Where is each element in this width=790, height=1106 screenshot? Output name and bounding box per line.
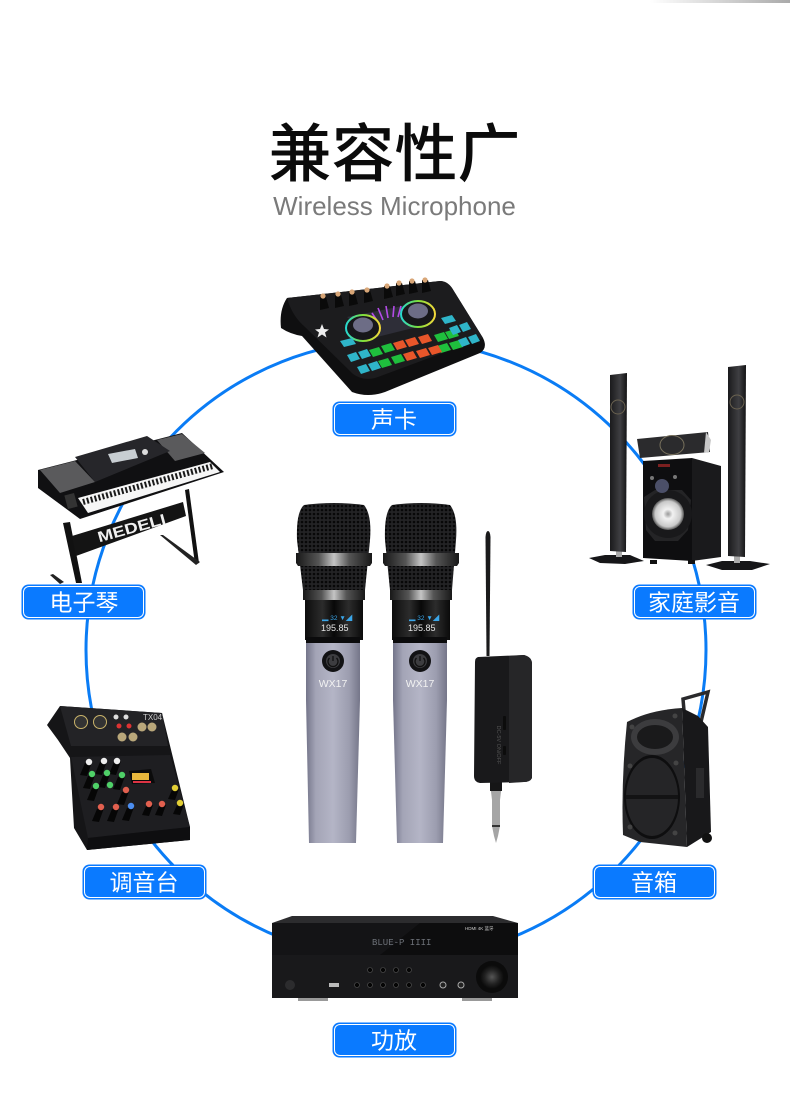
power button [322, 650, 344, 672]
subtitle: Wireless Microphone [273, 191, 516, 221]
switch label: DC-5V ON/OFF [495, 726, 501, 765]
label: home theatre [632, 584, 756, 620]
knobs [320, 280, 431, 310]
body [38, 433, 224, 519]
mixer knob caps [86, 758, 183, 810]
wireless receiver [474, 531, 532, 843]
label: speaker [592, 864, 716, 900]
left tower [589, 555, 644, 564]
label: electronic keyboard [22, 584, 146, 620]
mixer knob bodies [80, 761, 184, 822]
microphone 2 [383, 503, 459, 843]
title: 兼容性广 [268, 120, 520, 190]
top edge shadow [650, 0, 790, 3]
label: display text: BLUE-P IIII [372, 938, 431, 948]
connection ring [86, 340, 706, 960]
centre speaker [637, 432, 710, 458]
label: MEDELI: MEDELI [96, 511, 168, 546]
model name: WX17 [406, 678, 434, 690]
microphone 1 [296, 503, 372, 843]
mixer display [129, 769, 155, 784]
label: amplifier [332, 1022, 456, 1058]
label: HDMI badge: HDMI 4K 蓝牙 [465, 925, 494, 932]
label: electronic keyboard: 电子琴 [50, 590, 118, 616]
display readout: ▂ 32 ▼◢ [322, 614, 353, 622]
label: audio mixer [82, 864, 206, 900]
label: sound card: 声卡 [371, 406, 417, 432]
star logo [315, 324, 329, 338]
device: trolley speaker [622, 692, 712, 847]
label: home theatre: 家庭影音 [648, 590, 740, 616]
microphone 1: 195.85 [321, 623, 349, 633]
label: amplifier: 功放 [371, 1028, 417, 1054]
pads [369, 329, 463, 368]
device: audio mixer [47, 706, 190, 850]
display readout: ▂ 32 ▼◢ [409, 614, 440, 622]
microphone 2: 195.85 [408, 623, 436, 633]
subwoofer [692, 458, 721, 561]
power button [409, 650, 431, 672]
right tower [706, 561, 770, 570]
device: power amplifier [272, 916, 518, 1001]
device: sound card [281, 277, 485, 395]
stand [63, 522, 82, 583]
label: audio mixer: 调音台 [110, 870, 178, 896]
device: electronic keyboard [38, 433, 224, 584]
screen [347, 305, 433, 338]
model name: WX17 [319, 678, 347, 690]
device: home theatre [589, 365, 770, 570]
label: speaker: 音箱 [631, 870, 677, 896]
label: sound card [332, 402, 456, 436]
label: TX04: TX04 [143, 713, 163, 722]
